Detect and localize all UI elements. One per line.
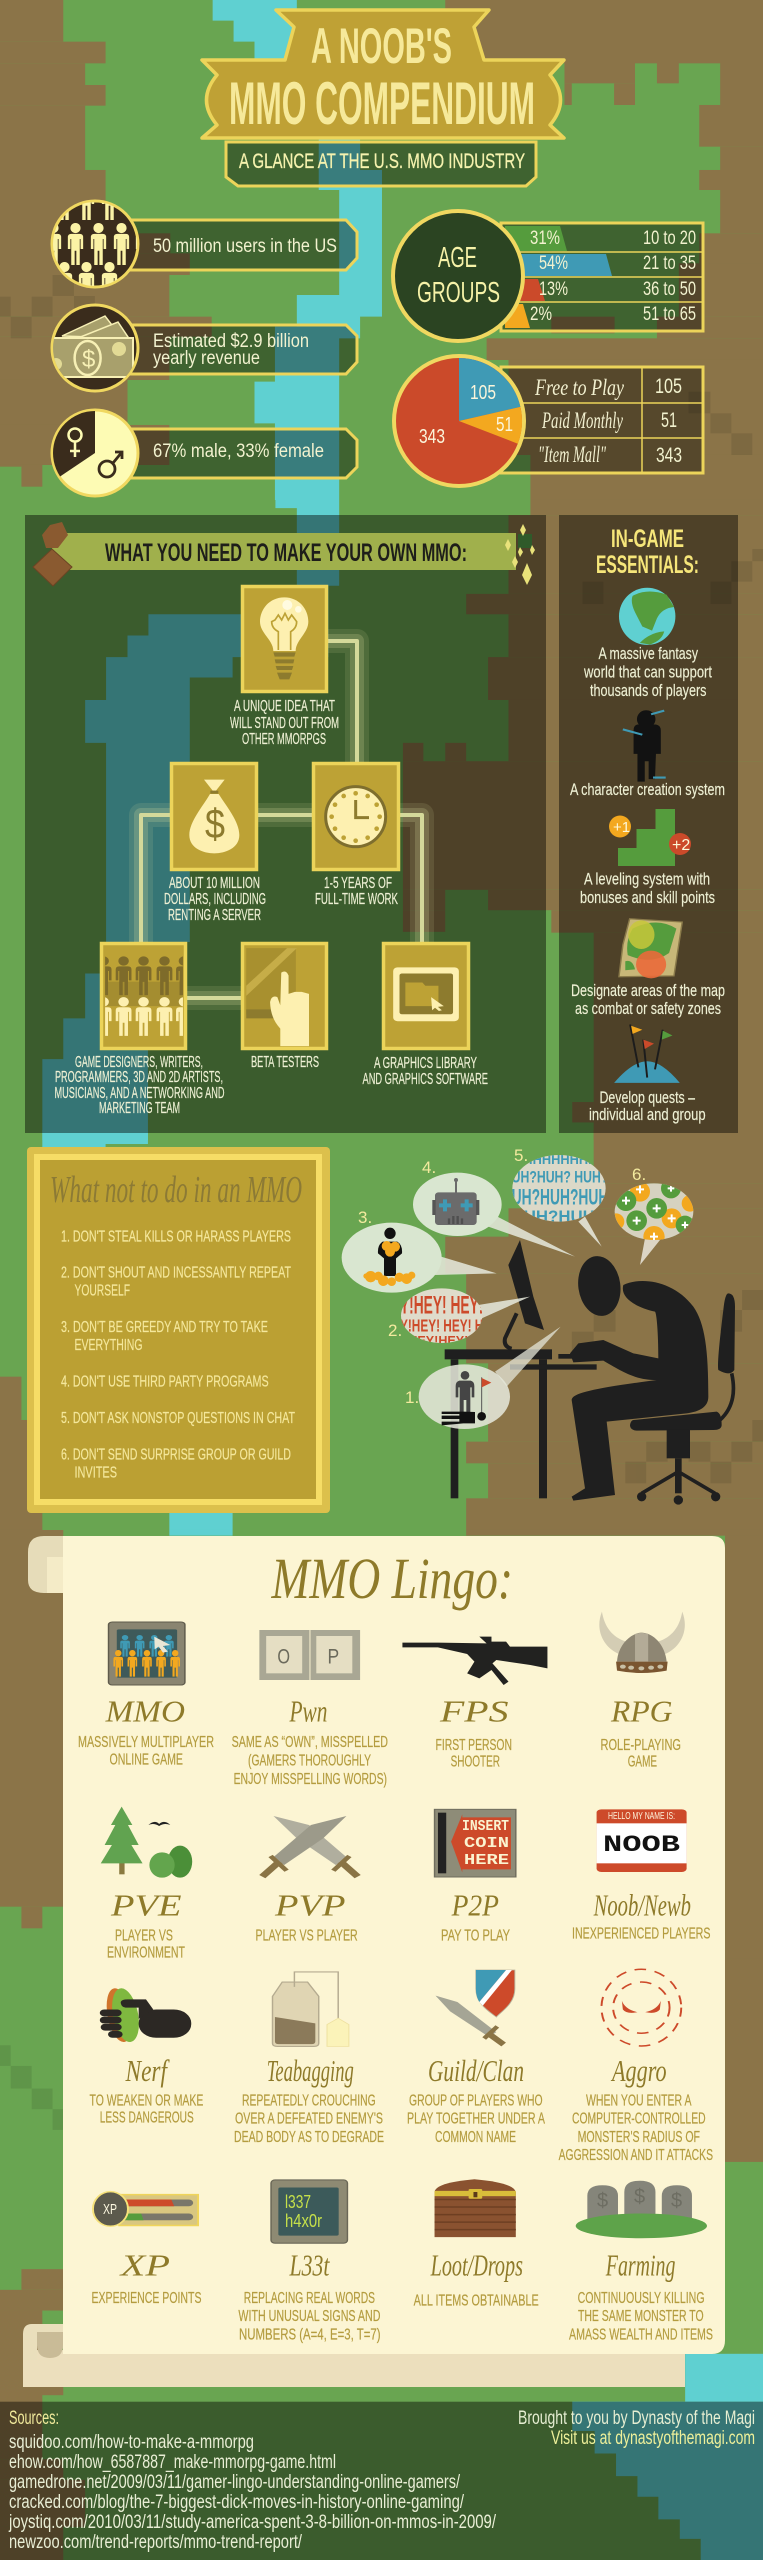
essentials captions: bonuses and skill points	[580, 888, 715, 907]
age labels: 13%	[539, 279, 568, 300]
card captions: BETA TESTERS	[251, 1054, 319, 1071]
icon: O and P keys: P	[327, 1644, 339, 1668]
bubble 2: shouting	[400, 1288, 530, 1348]
icon: gender split	[50, 408, 140, 498]
panel: what you need	[25, 515, 546, 1133]
lingo definitions: PAY TO PLAY	[441, 1928, 510, 1945]
title text	[229, 18, 535, 137]
icon: rifle	[402, 1637, 547, 1685]
lingo definitions: ENJOY MISSPELLING WORDS)	[234, 1771, 387, 1788]
card captions: OTHER MMORPGS	[242, 731, 326, 748]
sources	[8, 2408, 497, 2553]
card captions: MARKETING TEAM	[99, 1100, 180, 1117]
bubble 6: invites	[614, 1183, 694, 1265]
icons row 1	[109, 1612, 685, 1685]
age labels: 51 to 65	[643, 304, 696, 325]
age labels: 54%	[539, 253, 568, 274]
card captions: AND GRAPHICS SOFTWARE	[362, 1071, 488, 1088]
icon: tombstones	[576, 2181, 707, 2238]
icon: MMO monitor	[109, 1622, 185, 1685]
age groups circle: GROUPS	[417, 277, 500, 309]
lingo terms: P2P	[451, 1888, 499, 1923]
lingo definitions: FIRST PERSON	[436, 1737, 512, 1754]
icon: nerf	[100, 1987, 191, 2043]
card captions: PROGRAMMERS, 3D AND 2D ARTISTS,	[55, 1069, 223, 1086]
card captions: GAME DESIGNERS, WRITERS,	[75, 1054, 203, 1071]
lingo definitions: COMMON NAME	[435, 2129, 516, 2146]
bubble 5: questions: UH?HUH? HUH?	[512, 1167, 608, 1186]
sources: gamedrone.net/2009/03/11/gamer-lingo-understanding-online-gamers/	[9, 2472, 461, 2493]
bubble numbers: 5.	[514, 1146, 528, 1165]
essentials captions: world that can support	[583, 662, 712, 682]
icon: money: $	[82, 346, 95, 373]
icons row 3	[100, 1969, 681, 2046]
credit	[518, 2408, 755, 2449]
age groups circle: AGE	[438, 242, 477, 274]
icon: sparkles	[505, 524, 535, 585]
gamer silhouette	[570, 1253, 708, 1501]
icon: globe	[619, 588, 675, 645]
icon: character	[623, 710, 666, 782]
icon: name tag	[597, 1809, 687, 1872]
stat: users	[50, 200, 358, 288]
lingo definitions: REPEATEDLY CROUCHING	[242, 2092, 376, 2110]
lingo definitions: THE SAME MONSTER TO	[578, 2308, 704, 2325]
bubble 2: shouting: Y!HEY! HEY! H	[400, 1316, 483, 1336]
icon: pointing hand	[246, 948, 309, 1046]
essentials captions: A massive fantasy	[598, 644, 698, 663]
essentials captions: individual and group	[589, 1105, 706, 1124]
connector paths	[141, 641, 422, 998]
stat: revenue: Estimated $2.9 billion	[153, 331, 309, 352]
lingo terms: Nerf	[125, 2053, 170, 2088]
rules list: 5. DON'T ASK NONSTOP QUESTIONS IN CHAT	[61, 1410, 295, 1427]
card: money	[172, 764, 256, 870]
icon: wood blocks	[33, 522, 72, 586]
icon: crossed swords	[262, 1816, 358, 1877]
card: beta testers	[242, 944, 326, 1048]
icon text: XP	[103, 2201, 117, 2218]
card captions: A UNIQUE IDEA THAT	[234, 698, 335, 715]
coin slot and tag text: INSERT	[462, 1818, 509, 1835]
payment table: "Item Mall"	[538, 442, 606, 467]
pie chart: 51	[496, 414, 513, 436]
card captions: WILL STAND OUT FROM	[230, 715, 339, 732]
icon: money bag	[189, 780, 239, 853]
essentials captions: Develop quests –	[600, 1088, 695, 1107]
icon: quest flags	[614, 1024, 680, 1083]
lingo terms: FPS	[439, 1694, 508, 1729]
pie chart	[394, 356, 524, 486]
icon: XP bar	[93, 2192, 198, 2226]
what not to do title: What not to do in an MMO	[50, 1169, 302, 1211]
lingo definitions: OVER A DEFEATED ENEMY'S	[235, 2111, 383, 2128]
bubble 2: shouting: HEY!HEY!	[408, 1334, 468, 1348]
card captions: MUSICIANS, AND A NETWORKING AND	[54, 1085, 224, 1102]
payment table: 105	[655, 375, 682, 398]
rules list: 4. DON'T USE THIRD PARTY PROGRAMS	[61, 1374, 269, 1391]
icon text: $	[597, 2190, 608, 2212]
icons row 2	[101, 1807, 687, 1878]
icon: O and P keys: O	[277, 1644, 290, 1668]
panel: what not to do	[27, 1147, 330, 1513]
icon: O and P keys	[259, 1630, 360, 1680]
rules list: YOURSELF	[74, 1283, 130, 1300]
lingo definitions: SHOOTER	[451, 1754, 500, 1771]
icons row 4	[93, 2179, 707, 2243]
stat: revenue	[48, 305, 357, 391]
sources: cracked.com/blog/the-7-biggest-dick-moves-in-history-online-gaming/	[9, 2492, 465, 2513]
card: graphics	[384, 944, 468, 1048]
panel: in-game essentials	[559, 515, 738, 1133]
icon text: h4x0r	[285, 2211, 322, 2231]
icon: leet monitor	[271, 2180, 347, 2243]
bubble numbers: 3.	[358, 1208, 372, 1227]
age groups table	[501, 223, 703, 331]
coin slot and tag text: NOOB	[603, 1832, 680, 1858]
title text: A NOOB'S	[311, 18, 452, 74]
icon: tree and bushes	[101, 1807, 192, 1878]
coin slot and tag text: HELLO MY NAME IS:	[608, 1811, 675, 1822]
icon: levels	[609, 809, 691, 866]
age bars	[503, 226, 703, 328]
sources: Sources:	[9, 2408, 59, 2429]
lingo definitions: DEAD BODY AS TO DEGRADE	[234, 2129, 384, 2146]
bubble 5: questions: GHHHHHHHHH	[513, 1151, 607, 1167]
icon: treasure chest	[435, 2179, 516, 2237]
card captions: RENTING A SERVER	[168, 907, 261, 924]
payment table: 343	[656, 444, 682, 467]
lingo definitions: LESS DANGEROUS	[100, 2109, 194, 2126]
essentials heading: ESSENTIALS:	[596, 551, 699, 579]
lingo definitions: ONLINE GAME	[110, 1751, 183, 1768]
card captions: DOLLARS, INCLUDING	[164, 891, 266, 908]
icon: levels: +2	[672, 837, 690, 854]
card captions: ABOUT 10 MILLION	[169, 875, 260, 892]
lingo terms: PVP	[274, 1888, 346, 1923]
rules list: 3. DON'T BE GREEDY AND TRY TO TAKE	[61, 1319, 268, 1336]
stat: revenue: yearly revenue	[153, 348, 260, 369]
icon: monitor with folder	[393, 967, 459, 1021]
coin slot and tag text	[462, 1811, 680, 1869]
lingo definitions: PLAYER VS PLAYER	[256, 1928, 358, 1945]
icon text: l337	[285, 2192, 311, 2212]
card captions: 1-5 YEARS OF	[324, 875, 392, 892]
icon text: $	[634, 2186, 645, 2208]
icon text	[103, 2186, 682, 2231]
lingo terms: PVE	[110, 1888, 182, 1923]
age labels	[530, 228, 696, 325]
lingo title: MMO Lingo:	[271, 1546, 513, 1611]
icon: levels: +1	[613, 819, 630, 836]
bubble numbers	[358, 1146, 646, 1407]
lingo terms: Farming	[605, 2248, 675, 2283]
lingo definitions: SAME AS “OWN”, MISSPELLED	[232, 1734, 388, 1751]
icon: money	[48, 305, 138, 391]
coin slot and tag text: HERE	[464, 1852, 509, 1869]
bubble 5: questions	[512, 1151, 608, 1247]
rules list: EVERYTHING	[74, 1337, 142, 1354]
age labels: 2%	[530, 304, 552, 325]
lingo terms: Loot/Drops	[430, 2248, 523, 2283]
footer	[0, 2402, 763, 2560]
illustration: gamer at desk	[342, 1151, 735, 1505]
card captions: FULL-TIME WORK	[315, 891, 398, 908]
rules list	[61, 1229, 295, 1482]
lingo definitions: ENVIRONMENT	[107, 1944, 185, 1961]
icon: team rows	[105, 956, 183, 1036]
subtitle box	[226, 142, 536, 186]
bubble 3: greedy	[342, 1223, 497, 1293]
icon: viking helmet	[599, 1612, 685, 1673]
payment table: Paid Monthly	[541, 408, 624, 433]
bubble 1: kill stealing	[419, 1327, 561, 1429]
icon: coin slot	[435, 1809, 516, 1877]
rules list: INVITES	[74, 1465, 117, 1482]
icon: crowd	[50, 200, 140, 288]
lingo definitions: PLAYER VS	[115, 1928, 173, 1945]
lingo definitions	[78, 1734, 713, 2344]
lingo definitions: WITH UNUSUAL SIGNS AND	[238, 2308, 380, 2325]
age labels: 10 to 20	[643, 228, 696, 249]
lingo definitions: WHEN YOU ENTER A	[586, 2092, 692, 2110]
payment table: Free to Play	[534, 375, 625, 400]
lingo terms	[105, 1694, 691, 2283]
lingo definitions: ROLE-PLAYING	[600, 1737, 681, 1754]
bubble 5: questions: HUH?HUH?	[512, 1207, 605, 1226]
lingo definitions: ALL ITEMS OBTAINABLE	[414, 2293, 539, 2310]
icon: aggro radius	[601, 1969, 681, 2046]
desk and monitor	[445, 1240, 597, 1498]
lingo definitions: REPLACING REAL WORDS	[244, 2290, 375, 2307]
bubble 5: questions: UH?HUH?HUH	[512, 1184, 608, 1209]
lingo definitions: GROUP OF PLAYERS WHO	[409, 2092, 543, 2110]
card: clock	[314, 764, 398, 870]
bubble numbers: 4.	[422, 1158, 436, 1177]
icon: guild shield and sword	[436, 1970, 515, 2045]
lingo terms: XP	[118, 2248, 170, 2283]
essentials captions: A leveling system with	[584, 870, 710, 888]
icon: map	[619, 919, 682, 978]
scroll curls	[23, 1536, 685, 2387]
pie chart: 343	[419, 426, 445, 448]
lingo terms: Teabagging	[267, 2053, 354, 2088]
rules list: 1. DON'T STEAL KILLS OR HARASS PLAYERS	[61, 1229, 291, 1246]
ribbon heading: WHAT YOU NEED TO MAKE YOUR OWN MMO:	[105, 539, 467, 567]
bubble 4: robot	[413, 1173, 575, 1257]
lingo terms: Noob/Newb	[593, 1888, 691, 1923]
rules list: 6. DON'T SEND SURPRISE GROUP OR GUILD	[61, 1446, 291, 1463]
age labels: 36 to 50	[643, 279, 696, 300]
card: team	[96, 944, 192, 1048]
essentials heading	[596, 525, 699, 579]
bubble numbers: 2.	[388, 1321, 402, 1340]
stat: gender	[40, 405, 357, 496]
rules list: 2. DON'T SHOUT AND INCESSANTLY REPEAT	[61, 1265, 291, 1282]
icon: light bulb	[260, 597, 308, 679]
stat: gender: 67% male, 33% female	[153, 441, 324, 462]
bubble 2: shouting: Y!HEY! HEY!	[400, 1291, 483, 1319]
card captions: A GRAPHICS LIBRARY	[374, 1055, 477, 1072]
lingo terms: RPG	[610, 1694, 672, 1729]
lingo definitions: EXPERIENCE POINTS	[92, 2290, 202, 2307]
age labels: 21 to 35	[643, 253, 696, 274]
coin slot and tag text: COIN	[464, 1835, 509, 1852]
subtitle box: A GLANCE AT THE U.S. MMO INDUSTRY	[239, 150, 525, 173]
lingo terms: MMO	[105, 1694, 185, 1729]
card: idea	[242, 586, 326, 692]
age labels: 31%	[530, 228, 560, 249]
icon text: $	[671, 2190, 682, 2212]
essentials heading: IN-GAME	[611, 525, 684, 553]
lingo definitions: (GAMERS THOROUGHLY	[248, 1753, 371, 1770]
panel: MMO lingo scroll	[23, 1536, 725, 2387]
stat: users: 50 million users in the US	[153, 236, 337, 257]
payment table	[501, 367, 703, 473]
essentials captions	[570, 644, 725, 1124]
sources: joystiq.com/2010/03/11/study-america-spent-3-8-billion-on-mmos-in-2009/	[8, 2512, 497, 2533]
lingo definitions: TO WEAKEN OR MAKE	[90, 2092, 203, 2110]
lingo definitions: GAME	[628, 1754, 657, 1771]
lingo definitions: NUMBERS (A=4, E=3, T=7)	[239, 2327, 380, 2344]
age groups circle	[393, 211, 523, 341]
lingo definitions: MONSTER'S RADIUS OF	[578, 2129, 700, 2146]
icon: teabag	[273, 1972, 349, 2046]
lingo terms: Pwn	[289, 1694, 328, 1729]
card captions	[54, 698, 488, 1117]
chair	[630, 1293, 735, 1505]
sources: ehow.com/how_6587887_make-mmorpg-game.html	[9, 2452, 336, 2473]
lingo definitions: CONTINUOUSLY KILLING	[578, 2290, 705, 2307]
sources: newzoo.com/trend-reports/mmo-trend-report/	[9, 2532, 303, 2553]
lingo definitions: PLAY TOGETHER UNDER A	[407, 2111, 545, 2128]
card: money: $	[205, 800, 225, 847]
lingo terms: Aggro	[611, 2053, 667, 2088]
payment table: 51	[661, 409, 677, 432]
essentials captions: thousands of players	[590, 681, 706, 700]
ribbon heading	[52, 533, 516, 570]
icon: clock	[326, 787, 386, 847]
lingo terms: L33t	[289, 2248, 330, 2283]
pie chart: 105	[470, 382, 496, 404]
bubble numbers: 6.	[632, 1165, 646, 1184]
bubble numbers: 1.	[405, 1388, 419, 1407]
lingo terms: Guild/Clan	[428, 2053, 524, 2088]
lingo definitions: MASSIVELY MULTIPLAYER	[78, 1734, 214, 1751]
sources: squidoo.com/how-to-make-a-mmorpg	[9, 2432, 254, 2453]
title banner	[202, 10, 564, 138]
